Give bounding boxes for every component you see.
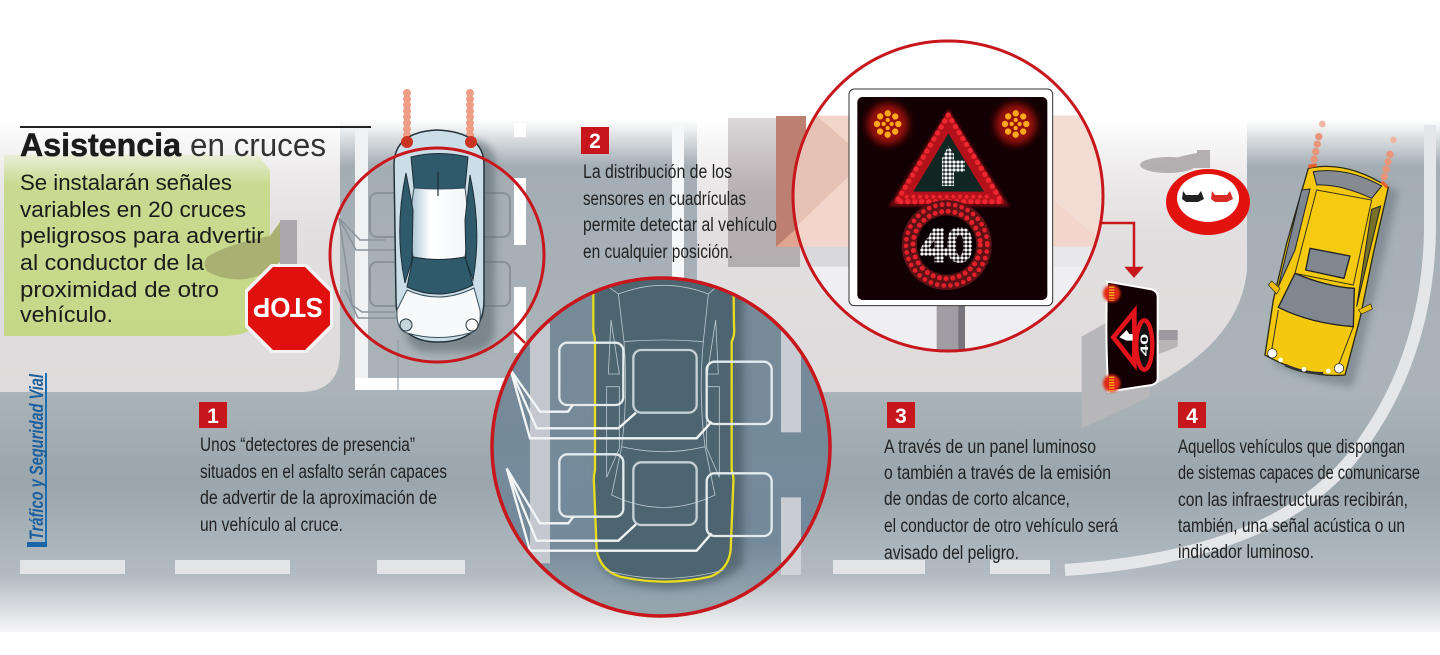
small detail circle xyxy=(330,148,544,362)
big detail circle: sensors under car xyxy=(490,276,832,618)
step 2 text: La distribución de los xyxy=(583,162,732,183)
car shadow xyxy=(405,140,495,352)
step 1 text xyxy=(200,435,447,536)
step 3 badge xyxy=(887,402,915,428)
step 4 text xyxy=(1178,437,1420,563)
brake light trails xyxy=(1313,134,1392,177)
intro text: peligrosos para advertir xyxy=(20,223,264,248)
car shadow xyxy=(1273,171,1398,387)
central sidewalk xyxy=(697,120,1247,392)
road strips xyxy=(530,323,801,564)
step 3 text xyxy=(884,437,1118,564)
road markings xyxy=(20,123,1430,575)
step 4 text: indicador luminoso. xyxy=(1178,542,1314,563)
icon: stop sign: STOP xyxy=(253,292,323,323)
roadside panel: 40 xyxy=(1139,334,1151,356)
step 2 text: en cualquier posición. xyxy=(583,242,733,263)
intro text: vehículo. xyxy=(20,302,113,327)
sign board xyxy=(849,89,1053,306)
car body xyxy=(1265,166,1388,375)
intro text: proximidad de otro xyxy=(20,277,219,302)
speed limit 40: 40 xyxy=(920,219,973,271)
six sensor loops xyxy=(559,343,772,536)
title: en cruces xyxy=(190,127,326,163)
small sensors under white car xyxy=(339,193,510,390)
source credit: Tráfico y Seguridad Vial xyxy=(27,373,48,540)
car silhouette xyxy=(593,270,734,582)
sensor leads xyxy=(507,370,712,551)
sign shadow on road xyxy=(728,116,806,267)
stop sign post xyxy=(204,220,297,280)
step 1 badge: 1 xyxy=(207,405,219,428)
step 1 text: de advertir de la aproximación de xyxy=(200,488,437,509)
road background xyxy=(0,120,1440,632)
step 1 text: Unos “detectores de presencia” xyxy=(200,435,415,456)
step 1 text: situados en el asfalto serán capaces xyxy=(200,462,447,483)
intro text: al conductor de la xyxy=(20,250,205,275)
intro text: Se instalarán señales xyxy=(20,170,232,195)
intro text: variables en 20 cruces xyxy=(20,197,246,222)
title: Asistencia xyxy=(20,127,181,163)
speed limit 40 xyxy=(902,200,992,290)
step 3 text: o también a través de la emisión xyxy=(884,463,1111,484)
step 1 text: un vehículo al cruce. xyxy=(200,515,343,536)
left sidewalk xyxy=(0,120,340,392)
step 2 text xyxy=(583,162,777,263)
roadside panel xyxy=(1082,282,1178,428)
intro text xyxy=(20,170,264,327)
connector between circles xyxy=(514,332,525,343)
car body shadow xyxy=(600,277,743,588)
yellow car xyxy=(1265,121,1398,387)
arrow to roadside panel xyxy=(1102,223,1141,276)
brake light trails xyxy=(407,93,470,138)
step 2 badge xyxy=(581,127,609,154)
step 3 badge: 3 xyxy=(895,405,907,428)
car detail lines xyxy=(605,285,723,578)
step 2 text: permite detectar al vehículo xyxy=(583,215,777,236)
step 2 text: sensores en cuadrículas xyxy=(583,189,746,210)
white car xyxy=(394,93,495,352)
step 3 text: de ondas de corto alcance, xyxy=(884,489,1070,510)
step 3 text: el conductor de otro vehículo será xyxy=(884,516,1118,537)
step 2 badge: 2 xyxy=(589,130,601,153)
title xyxy=(20,126,371,163)
panel: intro green box xyxy=(4,155,270,336)
icon: no overtaking sign xyxy=(1166,169,1250,235)
step 4 badge xyxy=(1178,402,1206,428)
step 1 badge xyxy=(199,402,227,428)
amber lights xyxy=(867,103,1036,145)
step 4 badge: 4 xyxy=(1186,405,1198,428)
step 3 text: avisado del peligro. xyxy=(884,543,1019,564)
icon: stop sign xyxy=(245,264,333,353)
car body xyxy=(394,130,484,342)
post shadow on sidewalk xyxy=(1140,150,1210,173)
step 3 text: A través de un panel luminoso xyxy=(884,437,1096,458)
warning triangle xyxy=(888,108,1010,207)
magnified panel circle xyxy=(780,33,1113,352)
